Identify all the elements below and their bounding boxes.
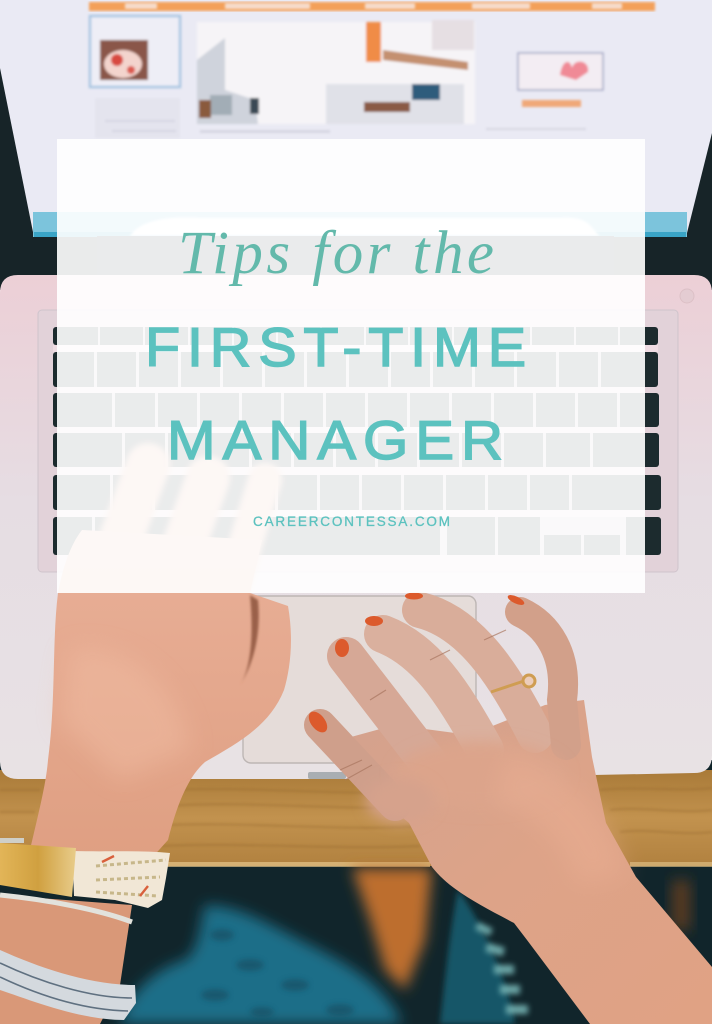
bracelets bbox=[0, 838, 170, 1020]
gold wrap bbox=[0, 843, 76, 897]
finger: middle bbox=[383, 634, 485, 750]
keyboard keys (dark, seen through the panel) bbox=[53, 327, 661, 555]
screen: faint text lines bbox=[95, 98, 586, 138]
screen: centre kitchen photo bbox=[197, 20, 475, 124]
website credit: CAREERCONTESSA.COM bbox=[253, 514, 450, 529]
nails bbox=[305, 592, 526, 736]
left hand bbox=[0, 465, 291, 1024]
laptop screen and bezel bbox=[0, 0, 712, 297]
trackpad bbox=[243, 596, 476, 763]
braided cord bbox=[72, 851, 170, 908]
right hand bbox=[305, 592, 712, 1024]
translucent title panel bbox=[57, 139, 645, 593]
bangle stack bbox=[0, 950, 136, 1020]
screen: orange nav bar bbox=[89, 2, 655, 11]
fingers under the panel bbox=[104, 465, 265, 595]
knuckle blend bbox=[395, 741, 565, 809]
finger: thumb bbox=[320, 725, 395, 805]
heading: FIRST-TIME: FIRST-TIME bbox=[145, 316, 533, 378]
screen: right product card and button bbox=[518, 53, 603, 107]
finger: index bbox=[346, 656, 430, 765]
screen: left product card bbox=[90, 16, 180, 87]
desk and sweater area bbox=[0, 760, 712, 1024]
finger: ring bbox=[420, 610, 535, 735]
thin rope bracelet bbox=[0, 895, 132, 922]
heading: MANAGER: MANAGER bbox=[167, 409, 510, 471]
laptop base and keyboard bbox=[0, 275, 712, 779]
ring bbox=[491, 675, 535, 692]
finger: pinky bbox=[520, 612, 566, 745]
heading: Tips for the: Tips for the bbox=[178, 220, 494, 287]
